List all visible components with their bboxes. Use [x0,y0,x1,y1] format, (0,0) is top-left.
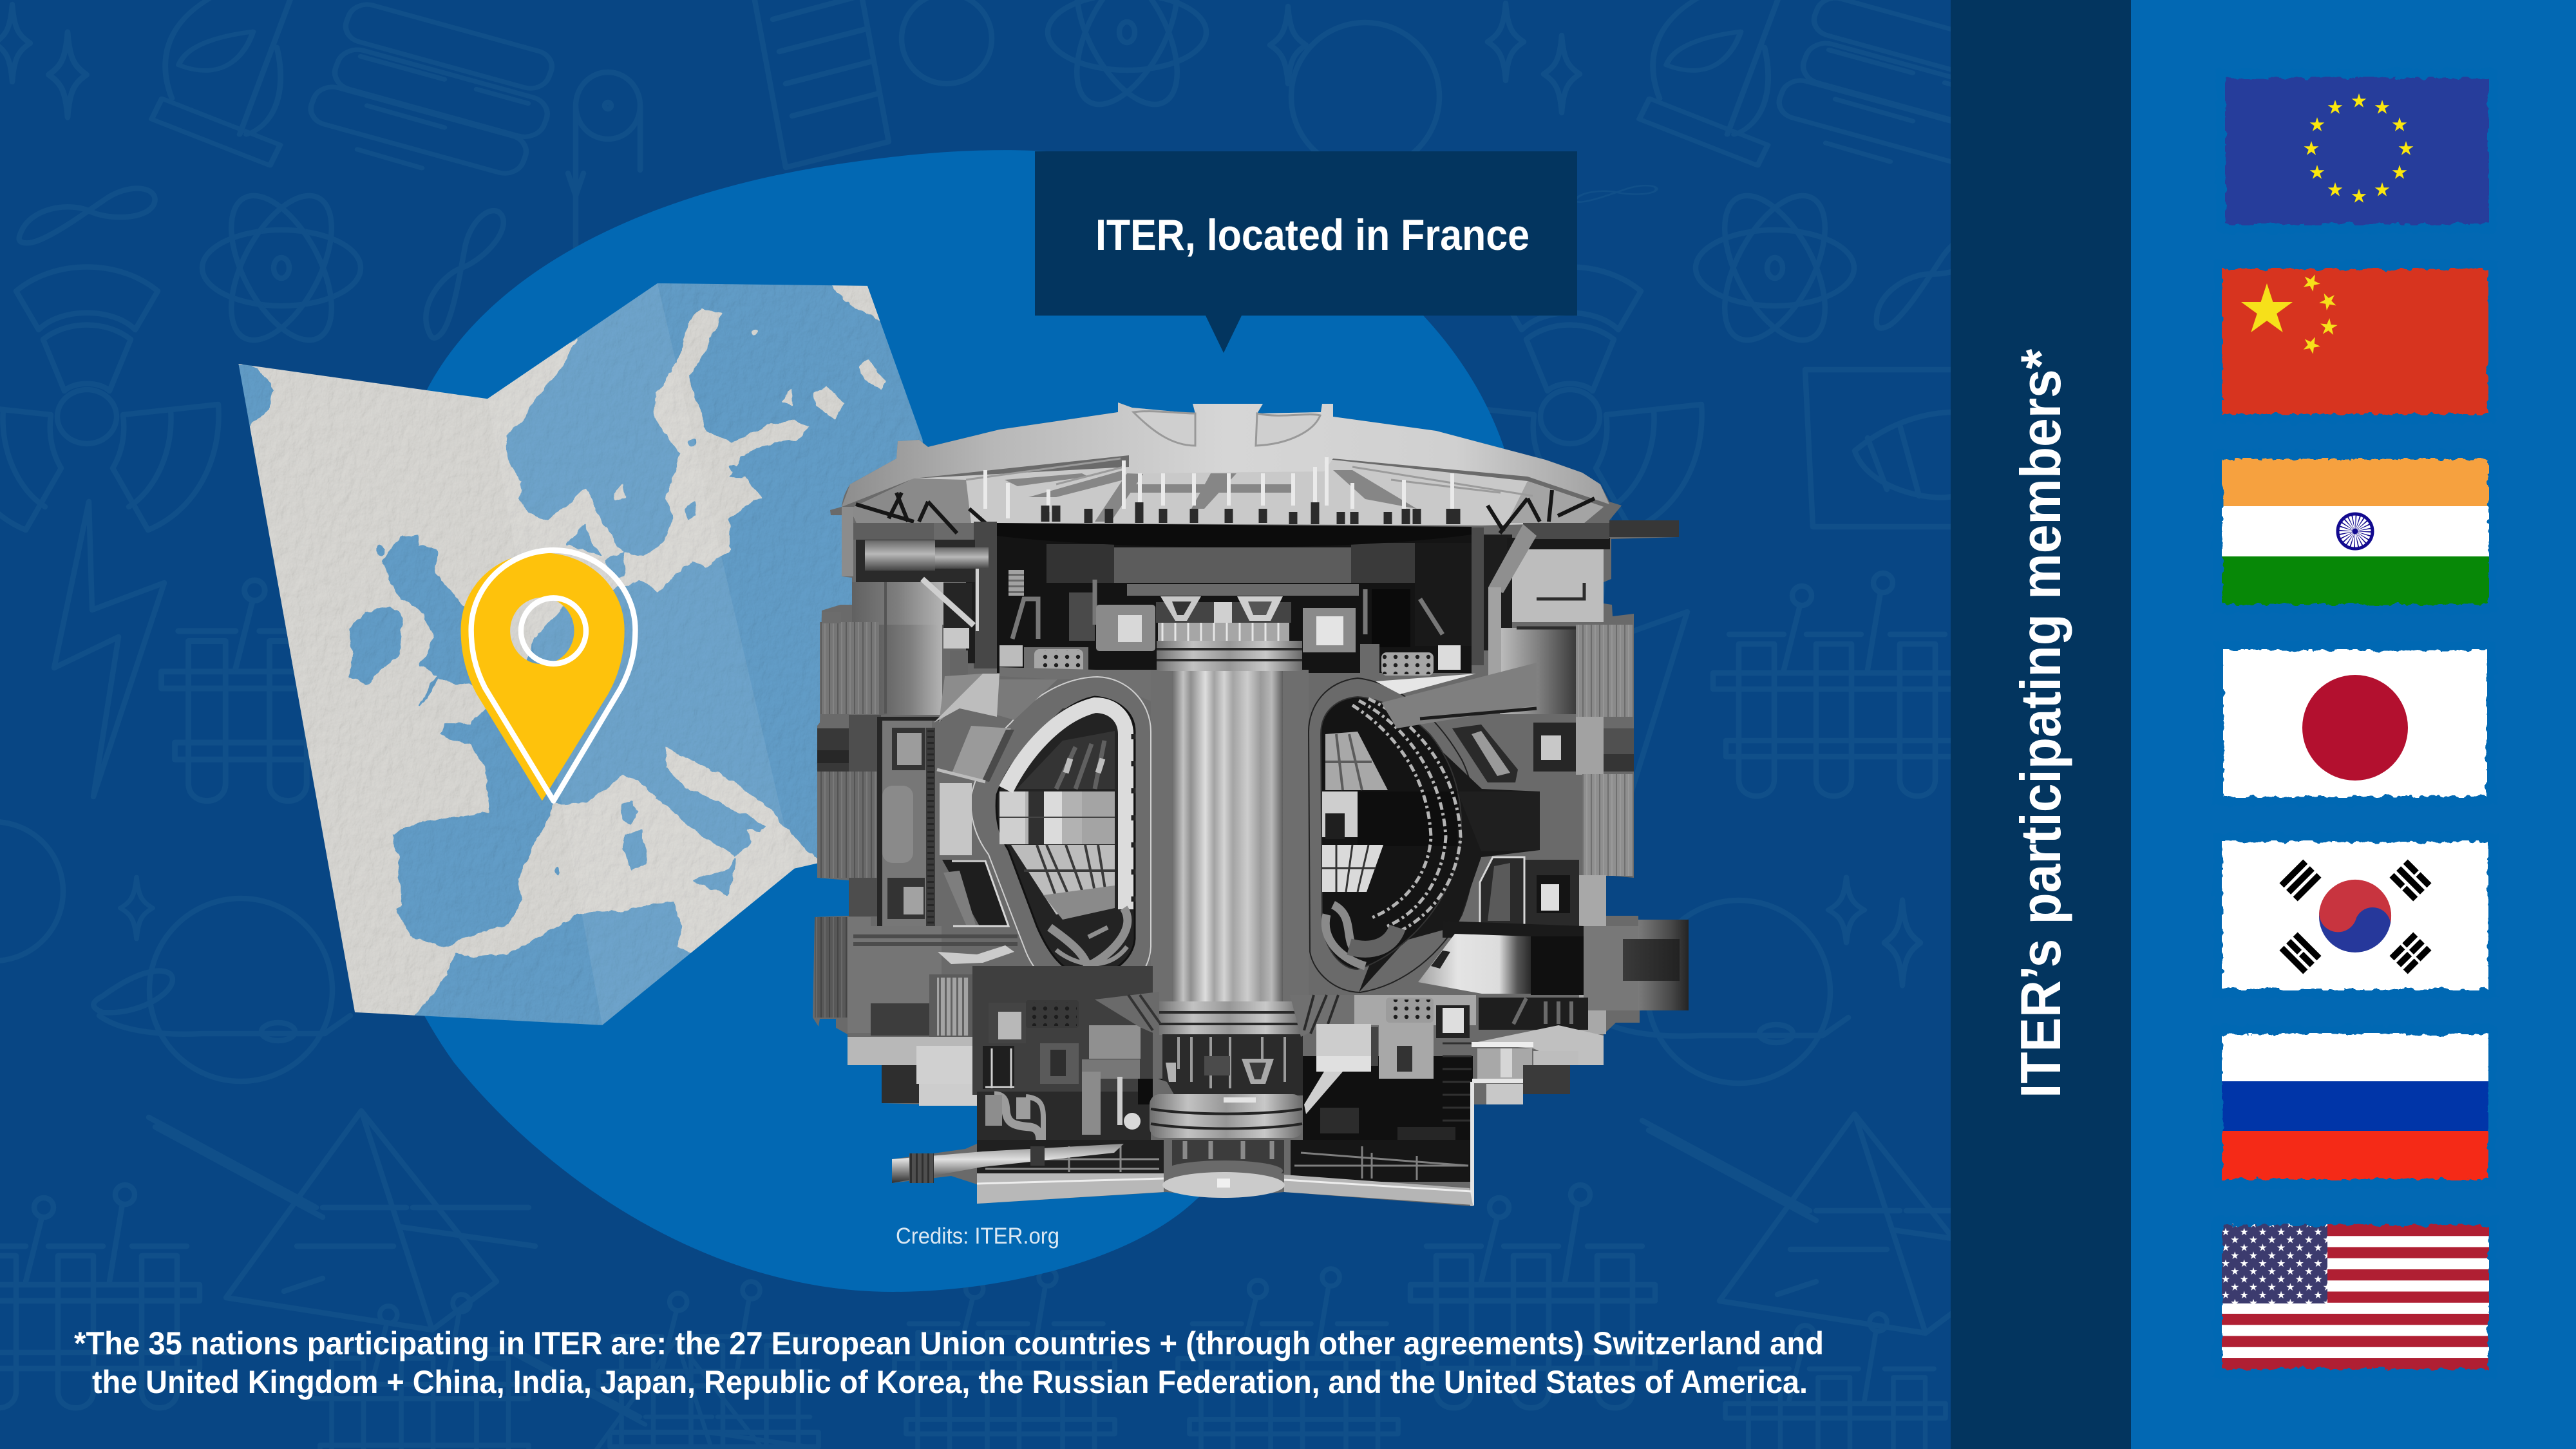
pin white outline [471,550,635,800]
upper left cylinder [856,540,989,582]
central backing [1151,670,1309,1005]
flag: Japan [2219,646,2492,801]
lower right white duct [1418,921,1584,995]
ITER tokamak cutaway [813,402,1689,1206]
right end cylinder [1584,920,1689,1010]
dome band [842,402,1609,507]
upper central equipment [1156,596,1291,641]
floor central disc [1162,1140,1285,1198]
left D vessel interior [996,697,1135,977]
footnote [74,1325,1824,1400]
dark sidebar [1951,0,2131,1449]
right D vessel interior [1321,697,1461,969]
left lower port [942,860,1009,926]
lower left machinery [848,926,1018,1106]
left frame with boxes [877,717,942,927]
dome support posts [1045,502,1456,524]
image credit: Credits: ITER.org [896,1224,1059,1249]
solenoid bottom clamp [1157,1001,1302,1035]
sidebar title: ITER’s participating members* [2009,348,2072,1098]
flag: United States [2217,1220,2494,1374]
flag: India [2217,455,2494,609]
left upper port duct [934,674,1074,782]
black lens ceiling [997,523,1472,547]
left vessel lower tiles [1011,845,1115,920]
right dark crescent [1359,726,1540,992]
left vessel mid tiles [999,791,1115,844]
callout box [1035,151,1577,353]
flag: China [2217,265,2493,419]
lower central panels [972,966,1164,1144]
right vessel mid tiles [1322,791,1457,846]
left dark column [966,522,997,668]
above bottom rings [1153,1034,1303,1114]
truss zone under the dome [850,460,1604,526]
map inland water shapes [230,363,764,1028]
tokamak silhouette [813,402,1689,1206]
lower right machinery [1290,995,1476,1182]
right D vessel shell [1309,678,1476,992]
bottom left pipe [892,1144,1124,1183]
right vessel lower tiles [1322,845,1383,892]
callout panel with pointer [1035,151,1577,353]
right lower window and box [1480,857,1579,926]
upper left tank [852,579,974,715]
blue blob behind map and tokamak [358,150,1521,1292]
pin yellow body [461,553,625,800]
location pin [461,550,635,800]
left vessel blanket ring [1006,705,1126,909]
floor frame left [977,1140,1164,1204]
map land masses [223,281,883,1038]
central solenoid [1172,670,1283,1003]
left D vessel shell [971,677,1151,998]
upper left housing [853,523,934,540]
folded map of Europe [223,273,942,1038]
background doodle pattern [0,0,2029,1449]
left vessel bottom pipework [1050,908,1128,969]
left equipment box [1096,605,1155,651]
left fins [815,612,881,1033]
footnote: the United Kingdom + China, India, Japan, Republic of Korea, the Russian Federation, and the United States of America. [92,1364,1808,1400]
right pipe bundle [1488,520,1679,681]
solenoid top clamp [1157,641,1302,671]
bottom rings [1150,1094,1303,1138]
pin white ring [521,598,586,664]
map sea base [393,283,922,947]
right upper box [1533,723,1576,772]
flag: Republic of Korea [2217,837,2493,994]
callout label: ITER, located in France [1095,211,1530,260]
right lower tank [1500,628,1576,714]
lower right shelf and column [1470,998,1604,1206]
upper left vessel wall [842,507,853,576]
upper chamber back wall [997,531,1472,673]
left mid port [940,783,972,855]
flag: European Union [2221,73,2494,229]
right mid dark port [1457,791,1540,851]
right upper dark column [1472,527,1512,665]
right equipment box [1303,608,1356,652]
right vessel bottom pipework [1325,905,1397,966]
left vessel top tiles [1017,731,1115,789]
flags panel [2131,0,2576,1449]
map paper texture [223,273,942,1033]
right fins [1576,625,1634,1034]
right vessel lattice [1352,699,1461,933]
small coil boxes and plates [999,644,1461,702]
right upper port beam [1376,663,1537,728]
right side upper tank [1512,547,1604,622]
map middle fold highlight [488,283,795,1025]
flag: Russia [2217,1030,2493,1184]
floor frame right [1284,1140,1473,1205]
footnote: *The 35 nations participating in ITER are: the 27 European Union countries + (through other agreements) Switzerland and [74,1325,1824,1361]
right upper window [1452,724,1518,782]
right vessel upper tiles [1325,732,1388,790]
